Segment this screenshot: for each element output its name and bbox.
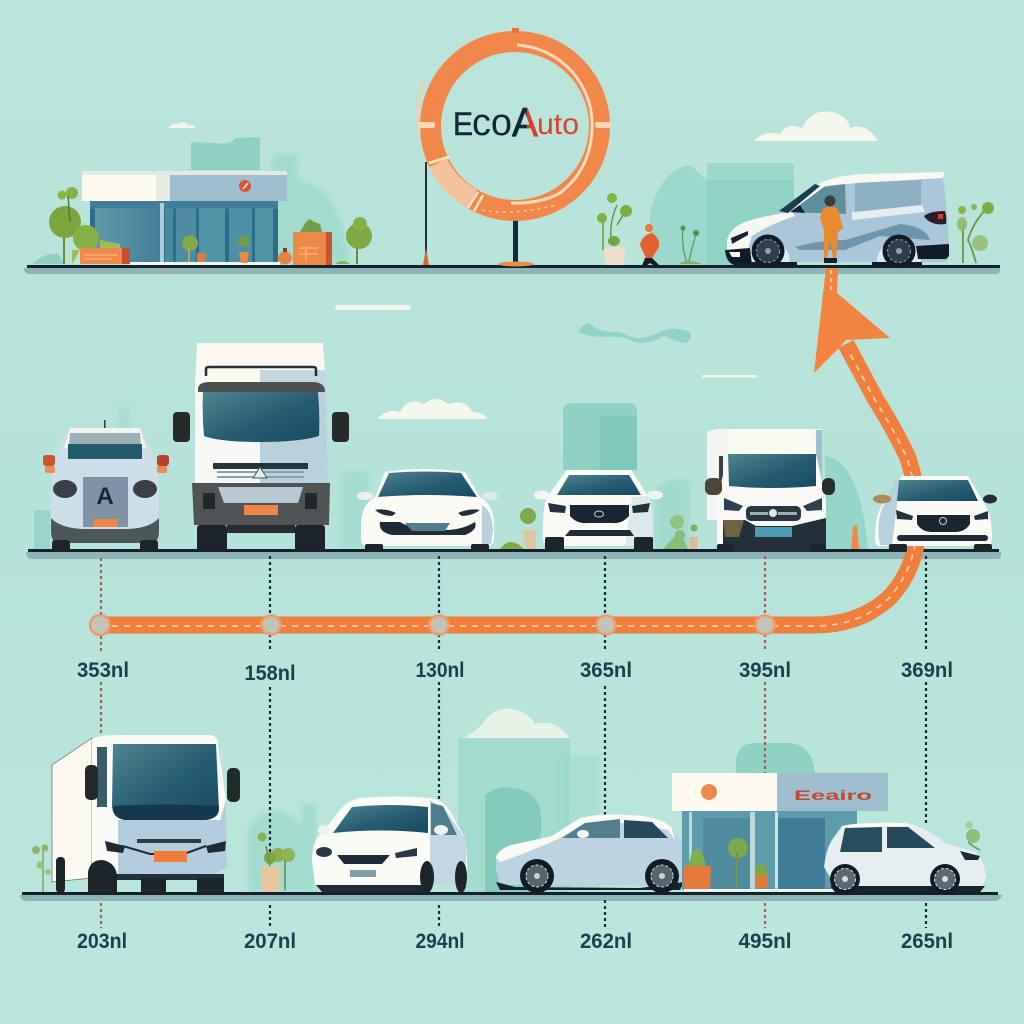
cloud: middle xyxy=(377,399,488,419)
streak: white dash right xyxy=(702,375,757,378)
plant: far right xyxy=(957,202,994,263)
distance labels: upper row: 365nl xyxy=(580,659,632,682)
background skyline: bottom xyxy=(248,738,815,892)
shop sign text: Eeairo xyxy=(794,787,872,803)
windows xyxy=(840,827,882,852)
distance labels: upper row: 158nl xyxy=(244,662,296,685)
shop building: top left xyxy=(82,171,287,265)
plant: behind compact xyxy=(966,822,980,850)
route nodes xyxy=(90,615,774,635)
windscreen xyxy=(68,433,142,459)
shop sign badge xyxy=(239,180,251,192)
small plant: sprig xyxy=(678,226,702,264)
plant in pot: beside sign xyxy=(597,193,632,265)
plate xyxy=(755,527,792,537)
distance labels: upper row: 395nl xyxy=(739,659,791,682)
van bumper and lights xyxy=(725,248,752,265)
lower bumper xyxy=(51,518,159,543)
vehicle: SUV, front view xyxy=(534,470,663,552)
logo text: E xyxy=(453,106,473,142)
headlights xyxy=(53,480,77,498)
ground line: top row xyxy=(24,265,1000,274)
wind squiggle xyxy=(578,324,691,343)
distance labels: upper row: 353nl xyxy=(77,659,129,682)
wheel arches xyxy=(746,240,790,262)
planter right xyxy=(293,232,326,265)
shop plants xyxy=(684,838,768,890)
van wheels xyxy=(752,234,916,268)
walking person xyxy=(640,224,662,268)
orange mirrors xyxy=(43,455,55,466)
wheels xyxy=(197,525,227,551)
shop building: bottom xyxy=(672,773,888,892)
vehicle: sedan, front view xyxy=(873,476,997,552)
background skyline: top right xyxy=(650,163,794,265)
person by van xyxy=(820,196,843,263)
distance labels: upper row: 130nl xyxy=(416,659,464,682)
bumper xyxy=(192,483,330,525)
side cab window xyxy=(97,747,107,807)
wheels xyxy=(420,861,434,893)
planter left xyxy=(80,248,122,264)
vehicle: box van, front view xyxy=(705,429,835,552)
lights and grille xyxy=(316,847,332,857)
plate xyxy=(93,519,118,527)
side windows xyxy=(431,803,457,835)
plate xyxy=(244,505,278,515)
plants between SUV and van xyxy=(663,515,698,549)
vehicle: compact van, front view: A xyxy=(96,483,114,510)
ground line: bottom row xyxy=(20,892,1002,901)
wheels xyxy=(830,864,860,894)
delivery van: top right xyxy=(725,172,949,268)
EcoAuto logo ring xyxy=(418,28,611,266)
roof fascia xyxy=(82,171,170,201)
cab xyxy=(717,454,826,548)
sign pole xyxy=(423,162,534,266)
shop plants xyxy=(182,235,250,263)
streak: white dash left xyxy=(335,305,411,310)
windows xyxy=(562,819,620,838)
wheels xyxy=(52,540,70,552)
wheels xyxy=(520,859,554,893)
van windows xyxy=(779,184,820,213)
logo text: uto xyxy=(537,108,579,141)
mirrors xyxy=(173,412,190,442)
logo text: A xyxy=(512,99,539,145)
ring xyxy=(418,28,611,212)
headlight xyxy=(960,851,980,860)
van side shading xyxy=(795,224,930,250)
distance labels: lower row: 294nl xyxy=(416,930,464,953)
distance labels: lower row: 265nl xyxy=(901,930,953,953)
cab xyxy=(92,735,227,874)
plant group: beside car xyxy=(500,508,536,549)
vehicle: white bus, front three-quarter xyxy=(52,735,240,893)
van sill xyxy=(749,262,797,266)
van body xyxy=(727,172,949,262)
visor xyxy=(198,382,325,392)
chassis xyxy=(496,882,684,890)
windscreen xyxy=(333,805,428,833)
dotted drop lines xyxy=(101,556,926,928)
background skyline: middle xyxy=(34,403,868,550)
cab roof xyxy=(195,343,326,387)
orange badge xyxy=(701,784,717,800)
distance labels: lower row: 203nl xyxy=(77,930,127,953)
cloud: bottom xyxy=(464,709,570,738)
cab xyxy=(51,428,159,543)
plate xyxy=(154,851,187,862)
mirrors xyxy=(85,765,98,800)
grille bars and lights xyxy=(137,839,201,843)
vehicle: white crossover, side view xyxy=(496,814,685,893)
distance labels: lower row: 207nl xyxy=(244,930,296,953)
vehicle: compact van, front view xyxy=(43,420,169,552)
trees and planters: top left xyxy=(49,187,372,265)
logo text: co xyxy=(472,102,512,144)
vehicle: white hatchback xyxy=(312,796,467,893)
cab body xyxy=(195,387,328,483)
distance labels: upper row xyxy=(77,659,953,685)
mirrors xyxy=(318,825,330,835)
cloud: top right xyxy=(754,111,878,141)
plant in pot: bottom xyxy=(258,832,295,892)
distance labels: lower row: 262nl xyxy=(580,930,632,953)
distance labels: lower row xyxy=(77,930,953,953)
lights xyxy=(724,498,743,511)
distance labels: lower row: 495nl xyxy=(738,930,792,953)
grille xyxy=(746,506,801,521)
grille xyxy=(213,463,308,469)
vehicle: sports car, front view xyxy=(357,469,498,552)
box side xyxy=(52,738,92,882)
plant: bus left xyxy=(32,844,51,892)
vehicle: large truck, front view xyxy=(173,343,349,551)
background skyline: top left xyxy=(32,137,350,264)
shop front glass xyxy=(90,201,278,263)
cloud: small top left xyxy=(168,122,196,128)
orange route arrow xyxy=(90,268,918,635)
vehicle: white compact, side view xyxy=(824,823,986,894)
traffic cone xyxy=(851,525,859,549)
ground line: middle row xyxy=(26,549,1001,559)
mirrors xyxy=(705,478,722,495)
mirror xyxy=(577,830,589,838)
tree right xyxy=(356,235,358,264)
windscreen xyxy=(112,744,219,820)
arrow head xyxy=(814,268,890,373)
windscreen xyxy=(203,392,319,442)
lower bumper xyxy=(723,518,826,552)
underside and wheels xyxy=(92,874,224,880)
distance labels: upper row: 369nl xyxy=(901,659,953,682)
chassis xyxy=(830,886,985,892)
grille panel xyxy=(83,477,128,527)
logo text xyxy=(453,99,579,145)
van white roof and nose xyxy=(782,172,944,212)
storefront xyxy=(682,811,857,890)
side wheel xyxy=(56,857,65,893)
roof fascia xyxy=(672,773,777,811)
